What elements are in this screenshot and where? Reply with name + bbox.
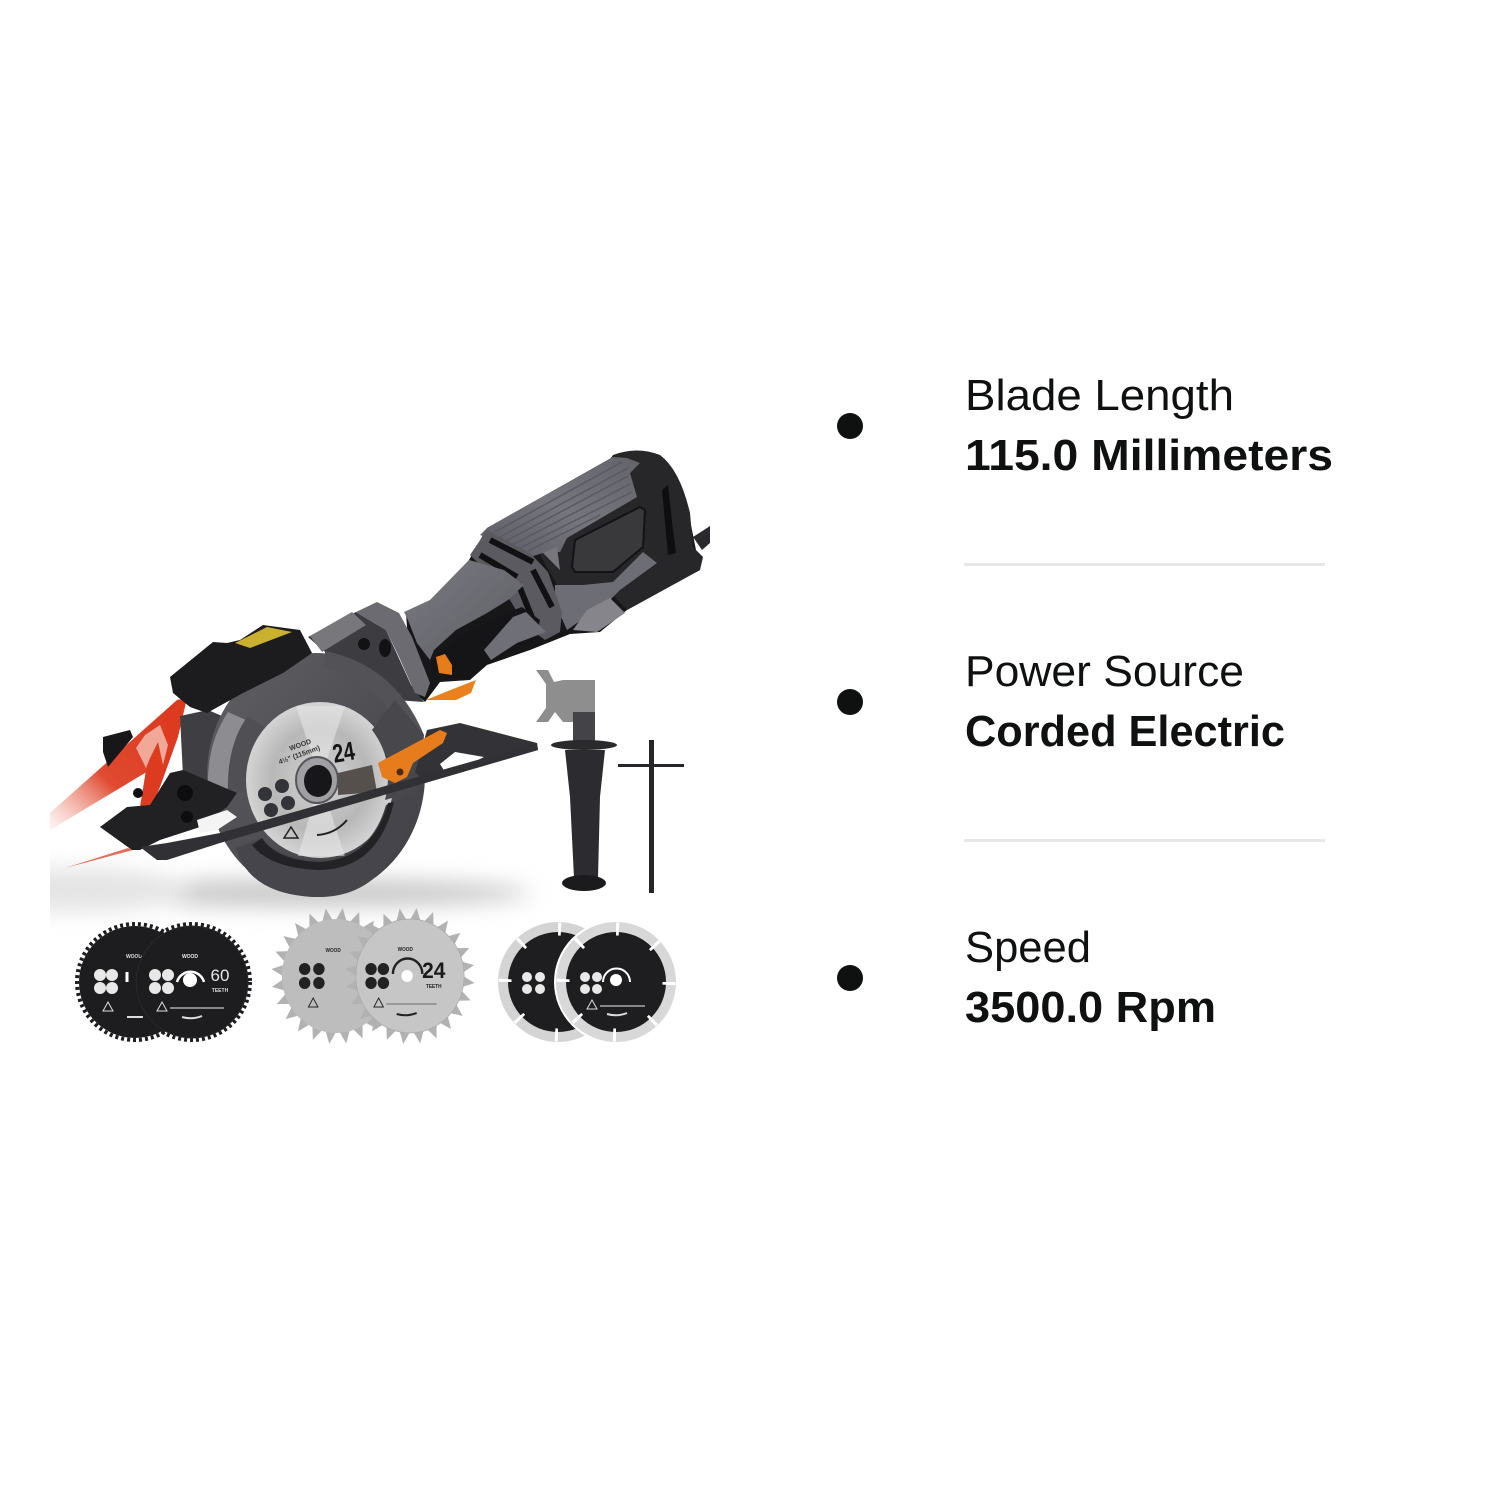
blade wood label: WOOD	[289, 738, 312, 753]
silver blade tooth count: 24	[422, 959, 445, 983]
diamond blade rear	[498, 922, 618, 1042]
value: 3500.0 Rpm	[965, 983, 1216, 1032]
neck grey body	[404, 560, 524, 660]
handle grip	[565, 750, 605, 878]
base bar	[140, 743, 538, 860]
adjustment knobs	[358, 638, 391, 657]
handle foot	[562, 875, 606, 891]
silver blades pair	[271, 907, 475, 1045]
silver blade label: WOOD	[398, 947, 413, 953]
orange wedge	[426, 680, 476, 700]
silver blade teeth label: TEETH	[426, 984, 442, 990]
base plate	[100, 723, 538, 860]
blade spec band	[338, 765, 377, 795]
guard right cover over blade	[372, 700, 424, 800]
ring slots	[480, 540, 552, 620]
guard light rim	[208, 712, 246, 789]
rear casting	[180, 711, 221, 780]
T guide bar	[618, 740, 684, 893]
blade safety icons	[258, 779, 295, 817]
black blade rear	[77, 924, 193, 1040]
front plate frame	[415, 723, 538, 783]
label: Blade Length	[965, 371, 1234, 420]
spec: power source	[837, 647, 1285, 756]
small triangle mark	[543, 547, 560, 570]
orange trigger	[436, 654, 452, 675]
lower neck textured grey	[484, 612, 546, 660]
saw blade	[246, 702, 394, 858]
guard housing	[207, 653, 425, 897]
motor shaft highlight	[310, 612, 366, 652]
plate cut out	[197, 810, 237, 833]
silver blade front	[345, 907, 475, 1045]
spec: blade length	[837, 371, 1333, 480]
plate window	[440, 752, 484, 772]
lower grip	[555, 552, 657, 630]
power cord	[693, 526, 710, 550]
saw body	[100, 450, 710, 897]
guard segment	[228, 716, 261, 790]
silver blade rear	[271, 907, 401, 1045]
warning triangle	[284, 827, 298, 838]
product photo: circular saw kit	[0, 450, 710, 1045]
handle shaft	[573, 712, 595, 746]
arbor bolt	[304, 765, 332, 797]
motor housing	[308, 612, 424, 702]
black blade tooth count: 60	[211, 966, 229, 985]
diamond blades pair	[498, 921, 677, 1043]
rear fence tab	[103, 730, 133, 767]
ring band	[470, 530, 562, 640]
bullet	[837, 965, 863, 991]
orange lever	[378, 730, 447, 783]
black blade front	[134, 924, 250, 1040]
black blade teeth label: TEETH	[212, 988, 229, 994]
rear plate	[100, 770, 237, 850]
value: Corded Electric	[965, 707, 1285, 756]
lower neck black	[516, 607, 540, 625]
spec: speed	[837, 923, 1216, 1032]
black blades pair	[77, 924, 250, 1040]
lower guard ring	[236, 795, 416, 897]
wrench	[536, 670, 595, 722]
rear handle grey grip	[480, 457, 640, 557]
laser beam	[50, 698, 187, 868]
blade hub	[296, 757, 338, 803]
rear handle black cap	[540, 450, 703, 610]
lower guard inner shadow	[252, 802, 394, 870]
laser housing box	[170, 625, 312, 713]
handle flange	[551, 740, 617, 750]
black side panel	[572, 507, 645, 572]
blade radial sheen	[296, 706, 345, 856]
yellow level label	[235, 627, 292, 648]
grip texture	[495, 462, 632, 551]
diamond blade front	[555, 921, 677, 1043]
ground shadow	[0, 868, 530, 912]
motor collar	[356, 602, 430, 697]
blade tooth count: 24	[330, 735, 357, 769]
label: Speed	[965, 923, 1091, 972]
label: Power Source	[965, 647, 1244, 696]
cap vent slot	[662, 485, 676, 555]
black blade label: WOOD	[182, 954, 198, 960]
lever hole	[396, 768, 404, 776]
adjuster knobs	[133, 785, 193, 823]
black blade rear: WOOD	[126, 954, 142, 960]
value: 115.0 Millimeters	[965, 431, 1333, 480]
silver blade rear: WOOD	[326, 948, 341, 954]
guard upper right shoulder	[325, 651, 424, 735]
bullet	[837, 689, 863, 715]
rear grey block	[573, 598, 625, 632]
blade size label: 4½" (115mm)	[278, 744, 321, 766]
bullet	[837, 413, 863, 439]
body dark underlay	[406, 457, 700, 702]
side handle accessory	[536, 670, 617, 891]
blade arrow	[317, 820, 347, 835]
